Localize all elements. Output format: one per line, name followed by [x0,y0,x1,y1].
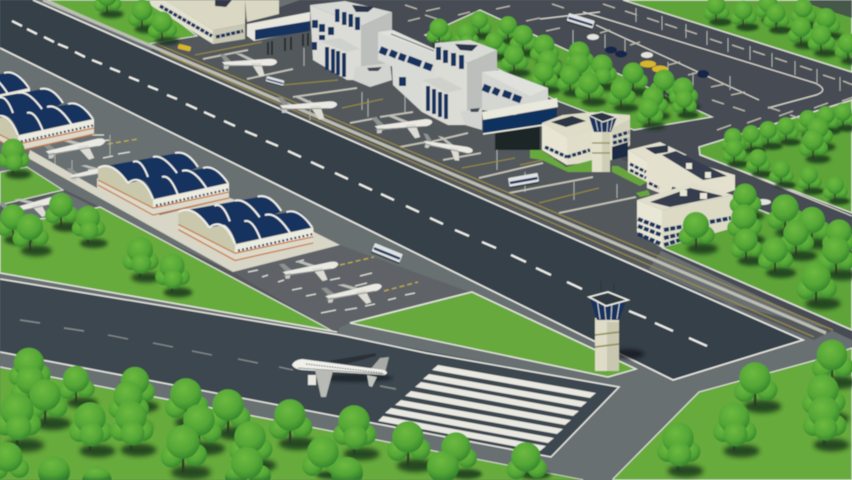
lower runway edge lines [0,273,619,480]
grass: left top triangle [0,167,63,205]
trees right grass [721,103,852,205]
trees left grass [0,193,192,297]
airplanes parked at terminal [219,53,474,164]
office building front [637,183,733,248]
light poles [55,8,840,299]
buses [265,13,595,264]
runway side band and yellow lines [43,0,852,337]
airplanes parked at hangars [0,133,384,310]
grass: centre triangle [350,292,636,377]
terminal: east wing and walkway [482,70,558,150]
grass: upper left [47,0,197,44]
control tower on grass [589,281,644,371]
grass: right lower [663,200,852,330]
grass: lower left [0,368,583,480]
runway edge lines [0,0,803,380]
trees right lower [678,183,852,310]
runway centre dashes [12,21,707,346]
right building small grass patches [612,166,650,197]
hangar far left top [0,58,30,120]
grass: left big triangle [0,207,333,331]
main runway [0,0,803,380]
left dark service road [0,156,340,331]
apron markings [88,135,472,323]
terminal: tower block two [422,40,497,130]
grass: parking centre [425,10,712,130]
trees front right [657,340,852,477]
concrete pad under hangars [28,150,340,272]
tree cluster left top [0,0,179,179]
apron stand lines [203,50,636,213]
lower runway dashes [20,320,396,389]
hangar left [0,89,94,151]
dark corner top right [800,0,852,18]
parking road lines [540,12,852,216]
cars [177,34,771,205]
terminal tower [588,112,617,172]
parking lot asphalt [150,0,852,340]
trees along bottom edge [0,432,551,480]
terminal: far left building [150,0,279,44]
terminal: control building [530,112,630,172]
trees front left [0,348,434,479]
lower runway [0,279,619,457]
grass: right with trees [699,100,852,213]
airliner on lower runway [292,353,393,397]
hangar apron [233,245,470,331]
apron yellow lines [195,42,599,203]
office building rear [628,142,735,205]
terminal: link block [378,30,437,112]
grass: top right verge [623,0,852,72]
trees behind terminal [426,11,700,130]
hangar centre [98,153,229,215]
hangar right [178,196,313,260]
apron yellow guide lines [108,139,418,291]
terminal: tower block one [310,1,392,87]
parking dashes [405,4,852,130]
crosswalk stripes [378,365,596,451]
apron in front of terminal [150,18,833,340]
grass: lower right [613,348,852,480]
trees top right [703,0,852,65]
terminal: covered walkway one [247,12,310,55]
